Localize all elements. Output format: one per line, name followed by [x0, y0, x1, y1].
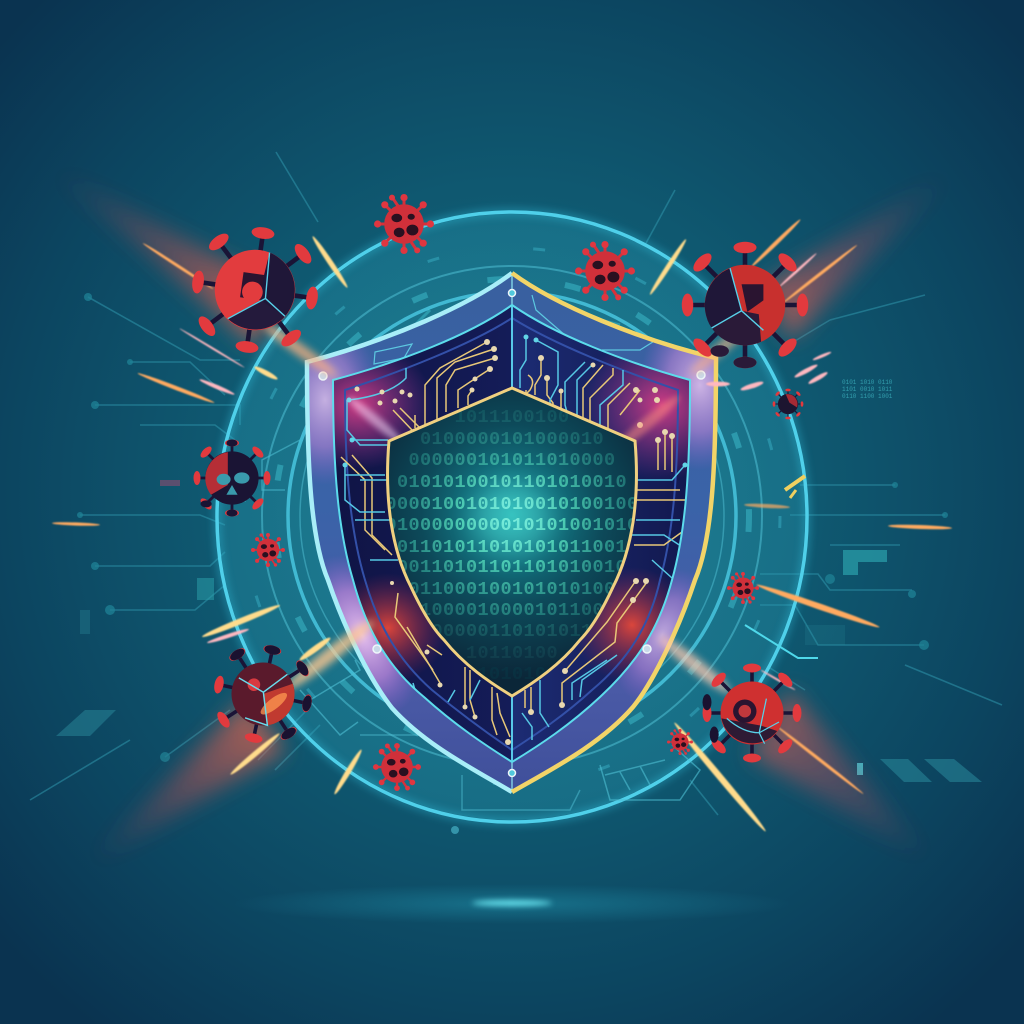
- virus: dark small right: [773, 389, 803, 419]
- gold circuit traces: [341, 342, 686, 737]
- virus: bottom small right: [667, 729, 693, 755]
- rivets: [319, 290, 705, 776]
- virus: lower left: [204, 635, 322, 753]
- circuit nodes: [354, 339, 675, 745]
- virus: small right middle: [727, 572, 759, 604]
- cyan nodes: [342, 334, 688, 468]
- binary code: 01010100101101010010: [397, 472, 627, 493]
- binary code: 011000100101010100: [408, 579, 616, 600]
- virus: top left large: [184, 219, 326, 361]
- virus: lower right: [702, 664, 802, 762]
- virus: top right large: [682, 242, 808, 368]
- panel edge: [333, 305, 690, 762]
- virus: top small right: [575, 241, 635, 301]
- band colour glows: [309, 272, 714, 794]
- virus: small left middle: [251, 533, 285, 567]
- small data blocks: [56, 480, 982, 782]
- binary code: 101010: [477, 664, 547, 685]
- band edge left: [307, 273, 512, 792]
- binary code: 000000101011010000: [408, 450, 616, 471]
- circuit nodes: [77, 293, 948, 762]
- energy rays: [45, 165, 955, 868]
- binary code: 0011010110101010110010: [385, 537, 639, 558]
- binary code: 1011100100: [454, 407, 570, 428]
- binary code: 00110101101101010010: [397, 557, 627, 578]
- shield outer band: [307, 273, 716, 792]
- binary code: 0100000101000010: [420, 429, 604, 450]
- shield: [304, 271, 718, 794]
- background circuit traces: [30, 152, 1002, 815]
- floor glow: [232, 884, 792, 924]
- tiny data text: 0101 1010 0110: [842, 379, 893, 386]
- light streaks: [52, 218, 952, 833]
- core gold edge: [388, 388, 636, 696]
- binary code: 10110100: [466, 643, 558, 664]
- outer protection ring: [217, 212, 818, 834]
- virus: bottom small left: [373, 743, 421, 791]
- binary code: 0000100101010010100100: [385, 494, 639, 515]
- corner flare glows: [260, 311, 763, 698]
- band edge right: [512, 273, 716, 792]
- tiny data text: 0110 1100 1001: [842, 393, 893, 400]
- tiny data text: 1101 0010 1011: [842, 386, 893, 393]
- virus: top small left: [374, 194, 434, 254]
- binary code: 0100000000010101001010: [385, 515, 639, 536]
- binary core shield: [388, 388, 636, 696]
- virus: skull: [194, 440, 270, 516]
- core centre glow: [470, 480, 554, 556]
- binary code: [390, 410, 634, 658]
- binary code: 0000001101010110: [420, 621, 604, 642]
- binary code: 010000100001011000: [408, 600, 616, 621]
- circuit panel: [333, 305, 690, 762]
- tiny data text: [842, 379, 893, 400]
- panel glows and circuits: [334, 306, 689, 761]
- cyan circuit traces: [345, 337, 685, 740]
